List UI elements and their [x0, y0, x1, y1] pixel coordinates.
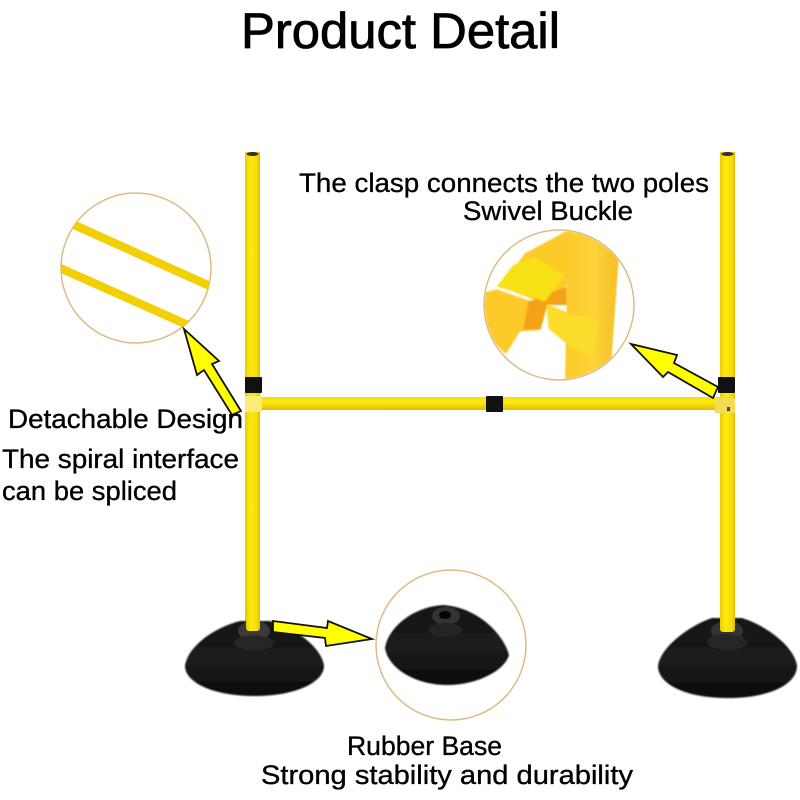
right pole — [720, 152, 735, 634]
left black band — [245, 377, 262, 393]
inset: rubber base — [376, 570, 526, 720]
clasp lower — [547, 304, 597, 357]
vertical pole — [565, 230, 623, 380]
title: Product Detail — [241, 3, 560, 59]
text: detachable design caption: The spiral interface — [2, 444, 239, 474]
arrow: to swivel buckle inset — [631, 344, 718, 398]
text: clasp caption — [299, 168, 709, 226]
lower-left pole — [480, 289, 542, 354]
crossbar — [258, 397, 732, 410]
lower rod — [60, 268, 190, 326]
text: rubber base caption: Strong stability and durability — [261, 760, 634, 790]
right black band — [718, 377, 735, 393]
orange gap — [523, 287, 567, 329]
upper rod — [70, 223, 212, 287]
left joint — [245, 396, 262, 412]
text: rubber base caption — [261, 731, 634, 790]
arrow: to detachable inset — [184, 329, 241, 415]
right joint — [715, 398, 735, 413]
clasp upper — [497, 257, 565, 302]
inset: detachable poles — [60, 193, 212, 343]
centre black band — [486, 396, 503, 412]
hurdle frame — [245, 152, 735, 634]
text: detachable design caption: Detachable Design — [8, 404, 243, 434]
text: clasp caption: Swivel Buckle — [463, 196, 633, 226]
left pole — [245, 152, 260, 634]
right rubber base — [658, 600, 797, 698]
inset: swivel buckle — [480, 230, 634, 380]
text: rubber base caption: Rubber Base — [347, 731, 502, 761]
rear diagonal pole — [510, 231, 570, 300]
arrow: to rubber base inset — [273, 621, 372, 646]
left rubber base — [185, 600, 324, 696]
text: detachable design caption — [2, 404, 243, 506]
text: clasp caption: The clasp connects the two poles — [299, 168, 709, 198]
text: detachable design caption: can be spliced — [2, 476, 177, 506]
